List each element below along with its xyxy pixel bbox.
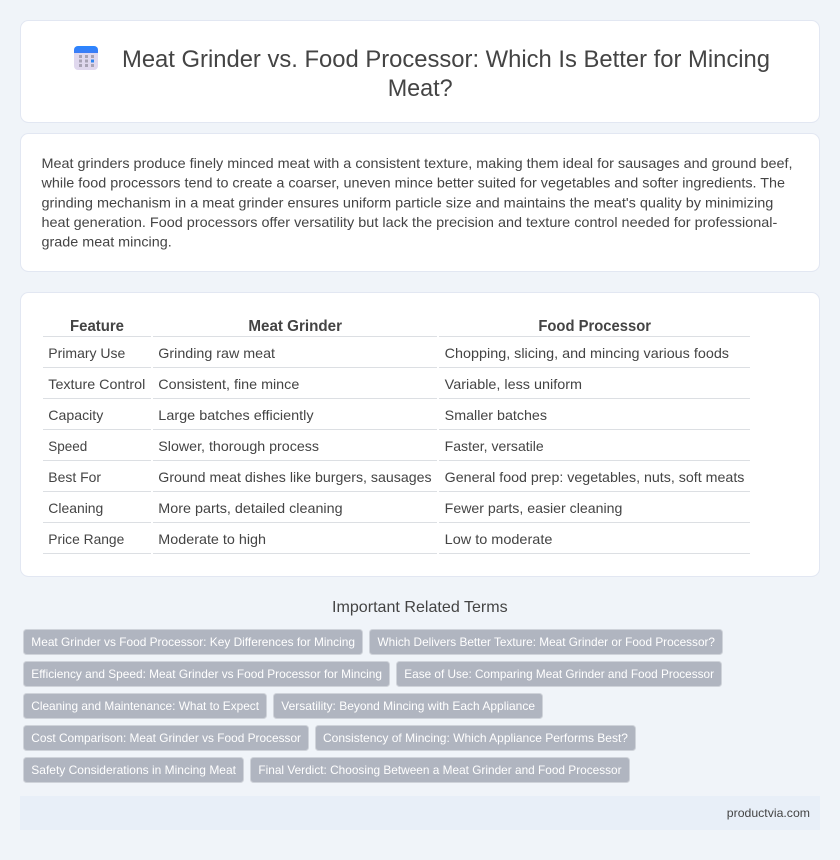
heading: important related terms: Important Related Terms <box>332 599 508 616</box>
table row: best for <box>43 469 750 492</box>
table row: capacity <box>43 407 750 430</box>
table row: capacity: Capacity <box>48 407 103 423</box>
table row: cleaning: More parts, detailed cleaning <box>158 500 343 516</box>
tag: Which Delivers Better Texture: Meat Grinder or Food Processor? <box>378 635 715 649</box>
table row: primary use: Chopping, slicing, and mincing various foods <box>445 345 729 361</box>
tag <box>396 662 722 686</box>
table row: speed <box>43 438 750 461</box>
table header row <box>43 318 750 337</box>
icon: calendar <box>74 46 98 70</box>
tag: Consistency of Mincing: Which Appliance Performs Best? <box>323 731 628 745</box>
title: Meat? <box>388 75 453 102</box>
tag <box>274 694 542 718</box>
tag: Safety Considerations in Mincing Meat <box>31 763 237 777</box>
text block: summary: grinding mechanism in a meat grinder ensures uniform particle size and maintains the meat's quality by minimizing <box>42 194 773 210</box>
table row: speed: Faster, versatile <box>445 438 544 454</box>
table row: cleaning <box>43 500 750 523</box>
table row: price range <box>43 531 750 554</box>
table row: capacity: Smaller batches <box>445 407 547 423</box>
title: Meat Grinder vs. Food Processor: Which Is Better for Mincing <box>122 46 770 73</box>
footer bar <box>20 796 820 830</box>
table row: best for: Ground meat dishes like burgers, sausages <box>158 469 432 485</box>
tag <box>316 726 636 750</box>
tag: Meat Grinder vs Food Processor: Key Differences for Mincing <box>31 635 355 649</box>
title <box>122 46 770 102</box>
tag: Final Verdict: Choosing Between a Meat Grinder and Food Processor <box>258 763 622 777</box>
text block: summary: grade meat mincing. <box>42 233 172 249</box>
tag <box>370 630 722 654</box>
table header row: Food Processor <box>538 318 651 335</box>
panel: summary paragraph <box>20 134 820 272</box>
table row: capacity: Large batches efficiently <box>158 407 314 423</box>
panel: comparison table <box>20 292 820 576</box>
tag <box>250 758 630 782</box>
text block: summary: Meat grinders produce finely minced meat with a consistent texture, making them ideal for sausages and ground beef, <box>42 155 793 171</box>
table header row: Feature <box>70 318 124 335</box>
text block: summary <box>40 155 793 249</box>
tag list: related terms <box>24 630 722 782</box>
table row: price range: Moderate to high <box>158 531 266 547</box>
tag: Ease of Use: Comparing Meat Grinder and Food Processor <box>404 667 714 681</box>
table row: primary use: Grinding raw meat <box>158 345 275 361</box>
table row: texture control <box>43 376 750 399</box>
footer source text: productvia.com <box>727 806 810 820</box>
panel: title header <box>20 20 820 122</box>
table row: speed: Slower, thorough process <box>158 438 319 454</box>
table row: primary use <box>43 345 750 368</box>
tag <box>24 662 390 686</box>
table header row: Meat Grinder <box>248 318 342 335</box>
table row: price range: Low to moderate <box>445 531 553 547</box>
tag: Cost Comparison: Meat Grinder vs Food Processor <box>31 731 301 745</box>
tag: Versatility: Beyond Mincing with Each Appliance <box>281 699 535 713</box>
tag: Efficiency and Speed: Meat Grinder vs Food Processor for Mincing <box>31 667 382 681</box>
tag <box>24 726 308 750</box>
tag <box>24 694 266 718</box>
tag <box>24 630 362 654</box>
tag <box>24 758 244 782</box>
tag: Cleaning and Maintenance: What to Expect <box>31 699 260 713</box>
table row: price range: Price Range <box>48 531 125 547</box>
table row: best for: Best For <box>48 469 101 485</box>
table row: cleaning: Cleaning <box>48 500 103 516</box>
table row: speed: Speed <box>48 438 87 454</box>
text block: summary: while food processors tend to create a coarser, uneven mince better suited for vegetables and softer ingredients. The <box>40 174 785 190</box>
table row: texture control: Consistent, fine mince <box>158 376 300 392</box>
table row: cleaning: Fewer parts, easier cleaning <box>445 500 622 516</box>
text block: summary: heat generation. Food processors offer versatility but lack the precision and texture control needed for professional- <box>42 214 778 230</box>
table row: primary use: Primary Use <box>48 345 126 361</box>
table row: texture control: Variable, less uniform <box>445 376 582 392</box>
table row: best for: General food prep: vegetables, nuts, soft meats <box>445 469 744 485</box>
table row: texture control: Texture Control <box>48 376 145 392</box>
